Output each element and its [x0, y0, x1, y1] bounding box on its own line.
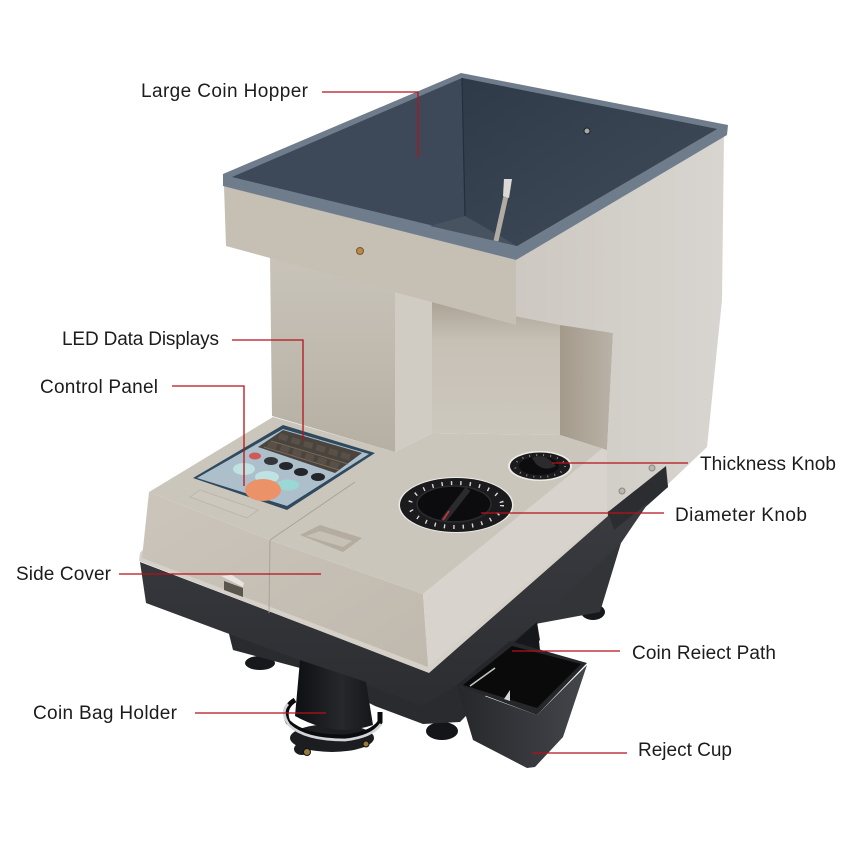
label: diameter knob: Diameter Knob: [675, 505, 807, 526]
body lip: [139, 500, 608, 673]
label: coin bag holder: Coin Bag Holder: [33, 703, 178, 724]
leader: large coin hopper: [322, 92, 418, 157]
hopper front face: [224, 186, 516, 325]
leader: coin bag holder: [195, 712, 326, 714]
rod: [496, 179, 512, 241]
leader: side cover: [119, 573, 321, 575]
side wall screws: [619, 465, 655, 494]
body front face: [142, 492, 428, 667]
usb port: [221, 575, 244, 597]
leader: reject cup: [532, 752, 627, 754]
brass screw: [356, 248, 364, 254]
hopper rim: [223, 73, 728, 260]
body side slope: [423, 445, 607, 667]
label: large coin hopper: Large Coin Hopper: [141, 81, 309, 102]
buttons: [249, 452, 261, 460]
leader: diameter knob: [481, 512, 664, 514]
reject cup: [457, 641, 587, 768]
body top surface: [149, 417, 607, 594]
leader: coin reject path: [512, 650, 620, 652]
diameter knob: [398, 477, 514, 533]
LED display: [258, 430, 362, 473]
upper base tray: [140, 466, 665, 706]
opening back wall: [432, 300, 560, 435]
coin bag holder: [284, 660, 381, 756]
leader: LED data displays: [232, 340, 303, 440]
handle recess: [300, 525, 362, 552]
label: coin reject path: Coin Reiect Path: [632, 643, 776, 664]
coin counter machine: [139, 73, 728, 768]
seam: [269, 482, 355, 613]
side wall: [516, 133, 724, 512]
label: LED data displays: LED Data Displays: [62, 329, 219, 350]
hopper interior: [232, 78, 717, 246]
control panel: [193, 425, 375, 510]
lower base tray: [228, 466, 668, 740]
thickness knob: [508, 451, 572, 481]
black panel at right: [608, 466, 668, 530]
label: thickness knob: Thickness Knob: [700, 454, 836, 475]
pillar: [395, 290, 432, 452]
hopper screw: [584, 128, 590, 134]
label: control panel: Control Panel: [40, 377, 158, 398]
label: reject cup: Reject Cup: [638, 740, 732, 761]
leader: control panel: [172, 386, 244, 486]
coin reject path: [495, 622, 540, 690]
column: [270, 255, 395, 452]
label: side cover: Side Cover: [16, 564, 112, 585]
leader: thickness knob: [552, 462, 688, 464]
label plate recess: [190, 490, 258, 518]
opening inner side panel: [560, 325, 613, 450]
